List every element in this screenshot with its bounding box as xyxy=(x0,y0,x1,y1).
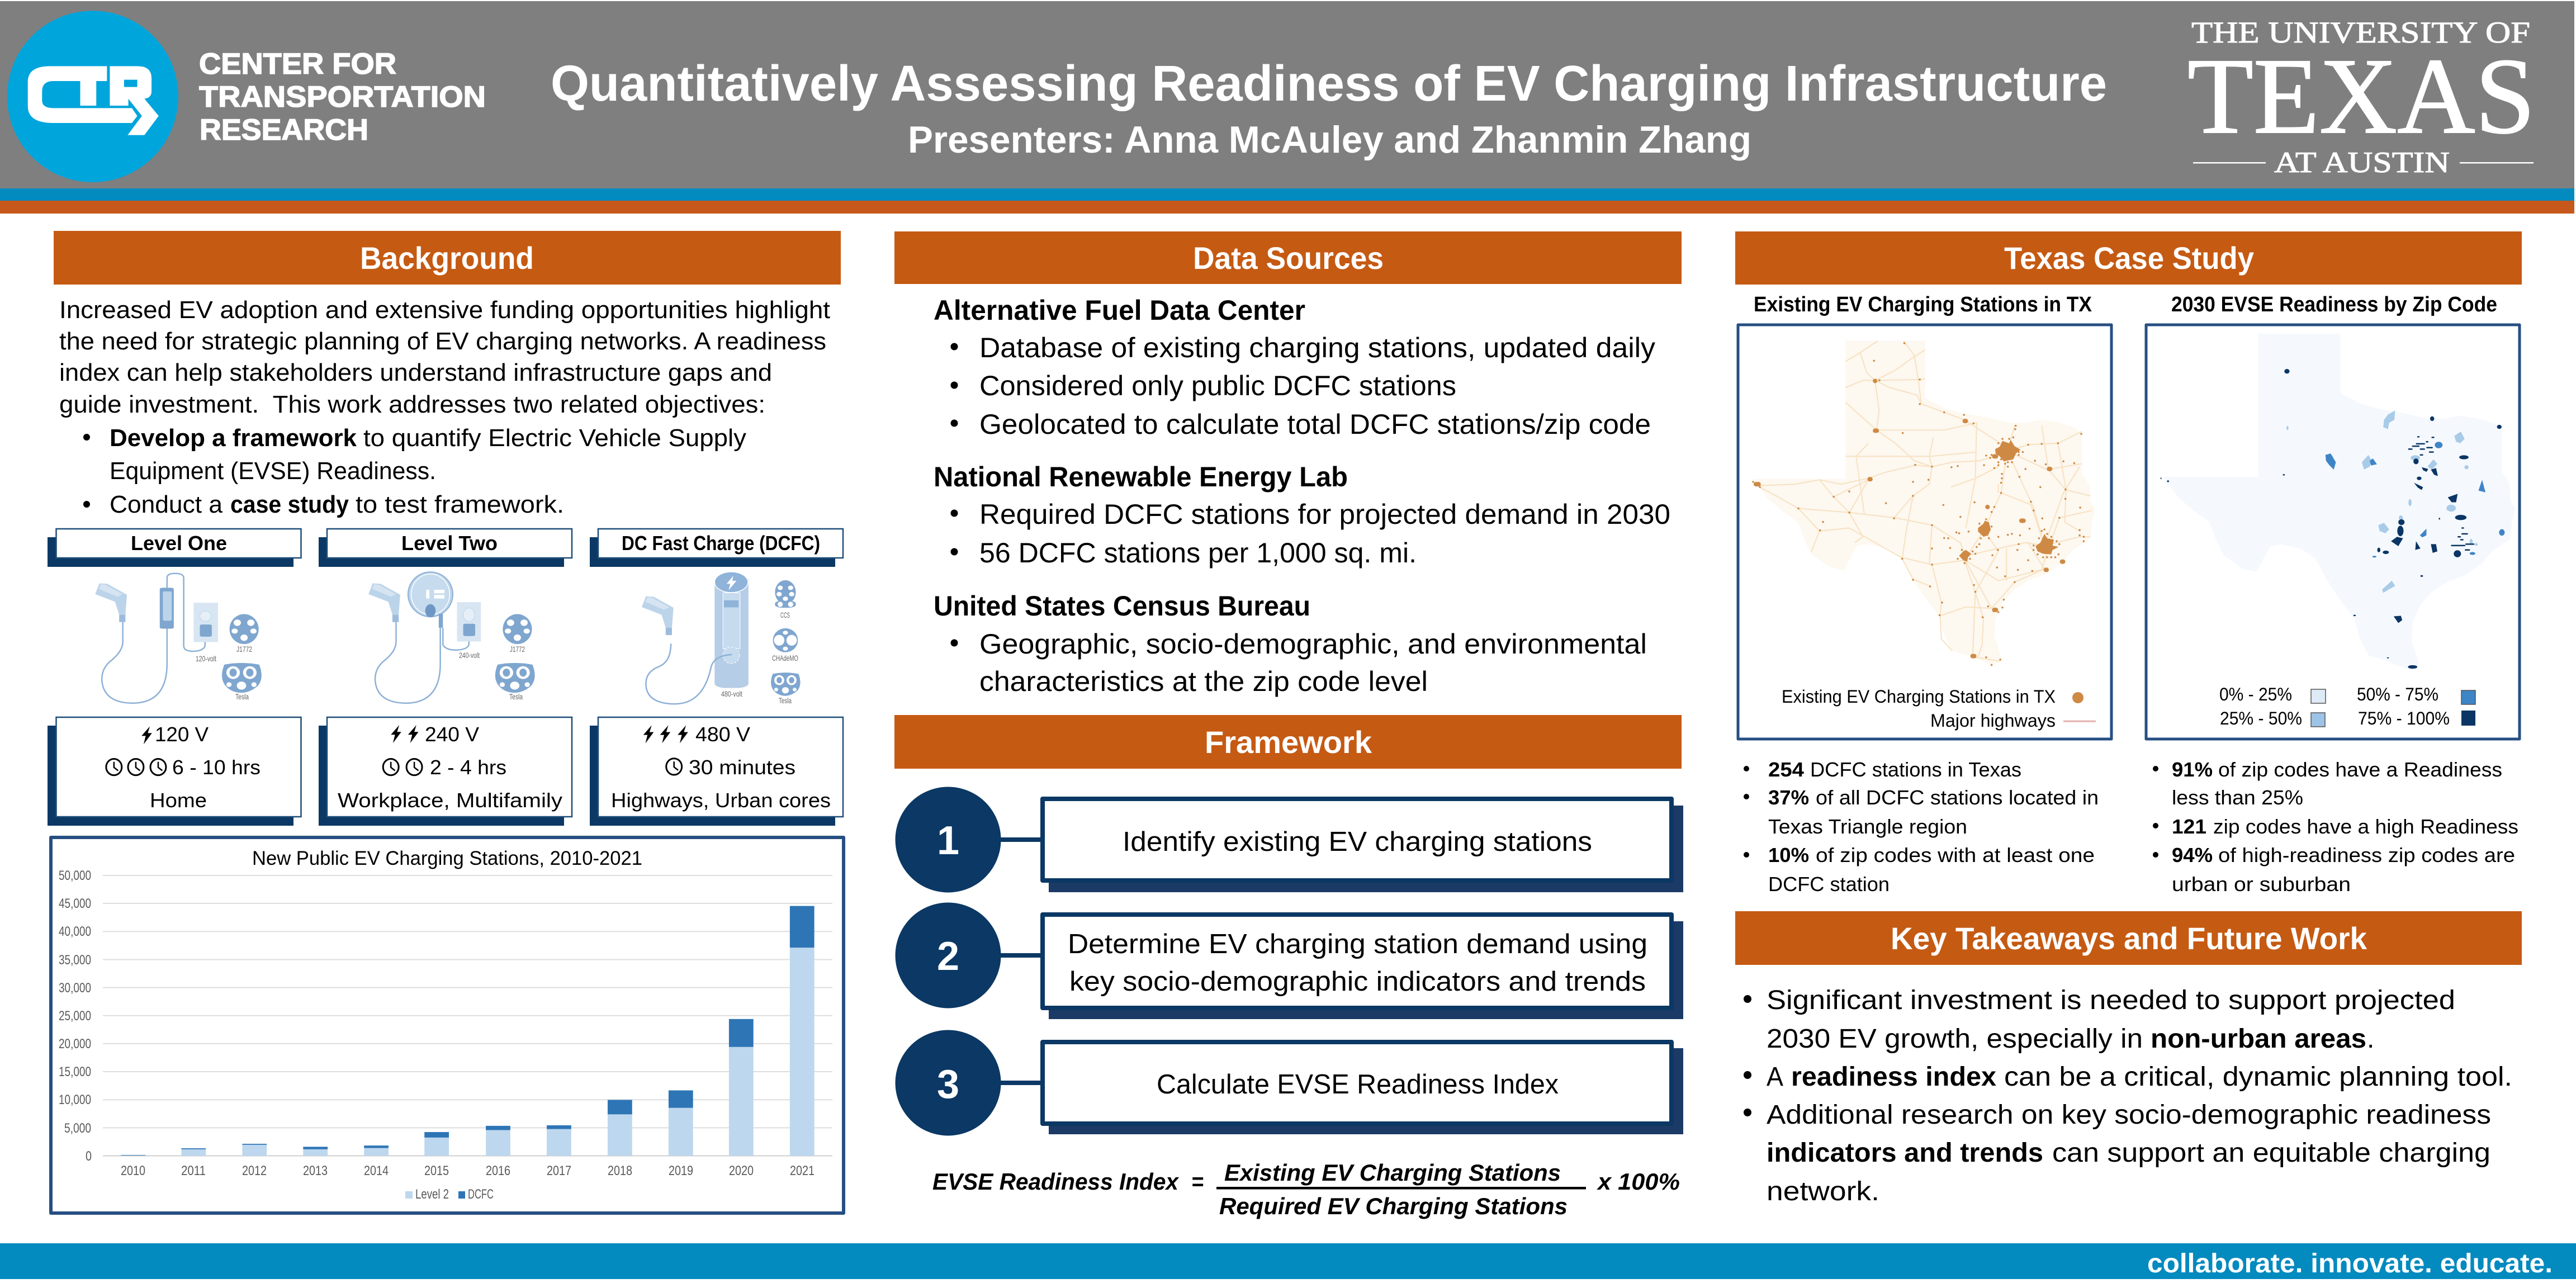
card: Level Two: 2 - 4 hrs xyxy=(430,756,506,779)
text block: National Renewable Energy Lab xyxy=(934,461,1670,569)
map legend: readiness xyxy=(2219,684,2475,728)
equipment labels: Tesla xyxy=(235,692,249,701)
map legend: stations: Major highways xyxy=(1930,711,2056,731)
heading: Background xyxy=(54,231,841,285)
card: DC Fast Charge: Highways, Urban cores xyxy=(611,789,831,812)
card: DC Fast Charge: 30 minutes xyxy=(689,756,795,779)
text block: takeaways: A xyxy=(1767,1062,1783,1092)
map: existing EV charging stations xyxy=(1738,325,2111,739)
text block: United States Census Bureau xyxy=(934,590,1647,697)
text block: takeaways: . xyxy=(2367,1024,2374,1054)
logo: University of Texas at Austin: TEXAS xyxy=(2187,36,2535,156)
text block: National Renewable Energy Lab: Required DCFC stations for projected demand in 2030 xyxy=(979,499,1670,530)
heading: Framework xyxy=(894,715,1682,769)
panel: Texas case study xyxy=(1735,231,2522,896)
text block: station statistics: of all DCFC stations located in xyxy=(1816,786,2099,809)
bar chart: new public EV charging stations: 20,000 xyxy=(59,1036,91,1052)
card: DC Fast Charge xyxy=(590,529,843,826)
equipment labels: J1772 xyxy=(236,645,252,654)
text block: Alternative Fuel Data Center: Considered only public DCFC stations xyxy=(979,370,1456,401)
logo: Center for Transportation Research wordmark: TRANSPORTATION xyxy=(199,80,486,113)
heading: Background: Background xyxy=(360,240,534,276)
icons: bolts and clocks xyxy=(106,725,688,775)
bar chart: new public EV charging stations: 0 xyxy=(86,1149,92,1164)
icon: level two charger xyxy=(368,572,535,703)
heading: Framework: Framework xyxy=(1205,724,1372,760)
heading: Data Sources xyxy=(894,231,1682,284)
chart legend: Level 2 xyxy=(415,1187,449,1202)
panel: framework xyxy=(894,715,1683,1219)
text block: readiness statistics: 121 xyxy=(2172,815,2206,838)
icon: charging equipment illustrations xyxy=(95,572,801,704)
text block: readiness statistics: urban or suburban xyxy=(2172,873,2351,896)
text block: background intro: guide investment. This work addresses two related objectives: xyxy=(59,391,765,418)
formula: EVSE readiness index: Required EV Charging Stations xyxy=(1219,1193,1568,1219)
map: 2030 EVSE readiness xyxy=(2146,325,2520,739)
formula: EVSE readiness index: = xyxy=(1191,1168,1204,1195)
heading: Data Sources: Data Sources xyxy=(1193,240,1384,276)
equipment labels: Tesla xyxy=(509,692,523,701)
text block: station statistics: 254 xyxy=(1768,758,1804,781)
presenters: Presenters: Anna McAuley and Zhanmin Zhang xyxy=(908,119,1751,161)
bar chart: new public EV charging stations: 5,000 xyxy=(64,1121,91,1136)
text block: objectives: to test framework. xyxy=(356,491,564,518)
logo: Center for Transportation Research wordmark xyxy=(199,48,486,146)
bar chart: new public EV charging stations: 2018 xyxy=(608,1163,632,1178)
bar chart: new public EV charging stations: 2020 xyxy=(729,1163,754,1178)
text block: Alternative Fuel Data Center: Geolocated to calculate total DCFC stations/zip code xyxy=(979,409,1651,440)
card: Level One: 120 V xyxy=(155,723,209,746)
logo: University of Texas at Austin: AT AUSTIN xyxy=(2274,146,2450,179)
bar chart: new public EV charging stations: 40,000 xyxy=(59,924,91,939)
text block: takeaways: indicators and trends xyxy=(1767,1138,2043,1168)
logo: Center for Transportation Research wordmark: CENTER FOR xyxy=(199,48,396,80)
text block: readiness statistics xyxy=(2153,758,2518,896)
map legend: readiness: 25% - 50% xyxy=(2220,708,2302,728)
text block: readiness statistics: 94% xyxy=(2172,844,2213,866)
text block: Alternative Fuel Data Center: Alternative Fuel Data Center xyxy=(934,295,1305,326)
equipment labels: CHAdeMO xyxy=(772,654,798,662)
icon: DC fast charger xyxy=(642,572,801,704)
step 2: 2 xyxy=(937,934,959,979)
text block: background intro: the need for strategic planning of EV charging networks. A readiness xyxy=(59,328,826,355)
step 2: key socio-demographic indicators and trends xyxy=(1069,967,1646,997)
text block: Alternative Fuel Data Center: Database of existing charging stations, updated daily xyxy=(979,332,1655,363)
text block: station statistics: DCFC stations in Texas xyxy=(1810,758,2021,781)
bar chart: new public EV charging stations: 45,000 xyxy=(59,896,91,911)
text block: objectives: Conduct a xyxy=(110,491,223,518)
equipment labels: 240-volt xyxy=(459,651,480,660)
heading: Key Takeaways and Future Work xyxy=(1735,911,2522,965)
formula: EVSE readiness index xyxy=(932,1159,1680,1219)
text block: station statistics: DCFC station xyxy=(1768,873,1890,896)
text block: objectives: Equipment (EVSE) Readiness. xyxy=(110,457,436,485)
map legend: readiness: 75% - 100% xyxy=(2358,708,2450,728)
bar chart: new public EV charging stations xyxy=(51,837,844,1213)
logo: University of Texas at Austin: THE UNIVERSITY OF xyxy=(2191,16,2530,49)
equipment labels: J1772 xyxy=(510,645,525,654)
bar chart: new public EV charging stations: 2014 xyxy=(364,1163,389,1178)
title: Quantitatively Assessing Readiness of EV Charging Infrastructure xyxy=(551,56,2107,112)
step 3: 3 xyxy=(937,1062,959,1107)
equipment labels: CCS xyxy=(780,610,790,619)
equipment labels xyxy=(196,610,798,705)
equipment labels: 120-volt xyxy=(196,654,216,663)
text block: station statistics: 10% xyxy=(1768,844,1809,866)
step 1: 1 xyxy=(937,818,959,863)
text block: background intro: index can help stakeholders understand infrastructure gaps and xyxy=(59,359,772,386)
chart legend xyxy=(405,1187,494,1202)
card: Level One: Home xyxy=(150,789,207,812)
chart legend: DCFC xyxy=(468,1187,494,1202)
card: Level Two: Workplace, Multifamily xyxy=(338,789,562,812)
text block: takeaways xyxy=(1744,986,2512,1206)
step 2 xyxy=(896,902,1683,1019)
step 3 xyxy=(896,1030,1683,1136)
step 1 xyxy=(896,787,1683,892)
card: Level Two: 240 V xyxy=(425,723,479,746)
panel: background xyxy=(48,231,844,1213)
equipment labels: Tesla xyxy=(779,696,792,705)
bar chart: new public EV charging stations: New Public EV Charging Stations, 2010-2021 xyxy=(252,847,642,869)
text block: readiness statistics: 91% xyxy=(2172,758,2213,781)
text block: objectives: Develop a framework xyxy=(110,424,357,452)
footer banner: collaborate. innovate. educate. xyxy=(2147,1249,2553,1278)
bar chart: new public EV charging stations: 2012 xyxy=(242,1163,267,1178)
text block: readiness statistics: zip codes have a high Readiness xyxy=(2213,815,2518,838)
text block: takeaways: readiness index xyxy=(1791,1062,1996,1092)
card: Level One: 6 - 10 hrs xyxy=(172,756,261,779)
map title: existing stations: Existing EV Charging Stations in TX xyxy=(1754,293,2092,316)
card: Level One: Level One xyxy=(131,532,227,555)
heading: Texas Case Study xyxy=(1735,231,2522,285)
text block: background intro: Increased EV adoption and extensive funding opportunities highlight xyxy=(59,296,830,324)
map legend: stations xyxy=(1782,686,2096,731)
text block: objectives: to quantify Electric Vehicle Supply xyxy=(363,424,746,452)
bar chart: new public EV charging stations: 2017 xyxy=(547,1163,571,1178)
map legend: readiness: 0% - 25% xyxy=(2219,684,2292,704)
map legend: readiness: 50% - 75% xyxy=(2357,684,2438,704)
panel: data sources xyxy=(894,231,1682,697)
card: Level One xyxy=(48,529,301,826)
bar chart: new public EV charging stations: 2016 xyxy=(486,1163,510,1178)
text block: takeaways: Additional research on key socio-demographic readiness xyxy=(1767,1100,2491,1130)
text block: station statistics: Texas Triangle region xyxy=(1768,815,1967,838)
text block: readiness statistics: of zip codes have a Readiness xyxy=(2218,758,2502,781)
text block: station statistics: of zip codes with at least one xyxy=(1816,844,2095,866)
formula: EVSE readiness index: Existing EV Charging Stations xyxy=(1224,1159,1561,1186)
bar chart: new public EV charging stations: 2021 xyxy=(790,1163,815,1178)
text block: takeaways: network. xyxy=(1767,1177,1879,1206)
bar chart: new public EV charging stations: 2010 xyxy=(121,1163,145,1178)
bar chart: new public EV charging stations: 2015 xyxy=(424,1163,449,1178)
bar chart: new public EV charging stations: 30,000 xyxy=(59,981,91,996)
text block: takeaways: can support an equitable charging xyxy=(2052,1138,2490,1168)
icon: level one charger xyxy=(95,574,262,703)
text block: background intro xyxy=(59,296,830,418)
bar chart: new public EV charging stations: 35,000 xyxy=(59,953,91,968)
text block: United States Census Bureau: characteristics at the zip code level xyxy=(979,666,1428,697)
text block: takeaways: 2030 EV growth, especially in xyxy=(1767,1024,2143,1054)
text block: objectives: case study xyxy=(230,491,349,518)
card: Level Two: Level Two xyxy=(401,532,498,555)
logo: CTR circle xyxy=(7,11,178,182)
heading: Texas Case Study: Texas Case Study xyxy=(2004,240,2254,276)
formula: EVSE readiness index: EVSE Readiness Index xyxy=(932,1168,1180,1195)
text block: takeaways: Significant investment is needed to support projected xyxy=(1767,986,2455,1015)
card: Level Two xyxy=(319,529,572,826)
text block: readiness statistics: less than 25% xyxy=(2172,786,2303,809)
text block: National Renewable Energy Lab: 56 DCFC stations per 1,000 sq. mi. xyxy=(979,537,1417,569)
logo: Center for Transportation Research wordmark: RESEARCH xyxy=(200,113,368,146)
text block: station statistics xyxy=(1744,758,2099,896)
bar chart: new public EV charging stations: 10,000 xyxy=(59,1092,91,1107)
step 2: Determine EV charging station demand using xyxy=(1068,929,1647,959)
text block: takeaways: non-urban areas xyxy=(2151,1024,2366,1054)
text block: Alternative Fuel Data Center xyxy=(934,295,1655,440)
text block: United States Census Bureau: Geographic, socio-demographic, and environmental xyxy=(979,628,1647,660)
formula: EVSE readiness index: x 100% xyxy=(1597,1168,1680,1195)
text block: station statistics: 37% xyxy=(1768,786,1809,809)
footer banner xyxy=(0,1243,2576,1279)
heading: Key Takeaways and Future Work: Key Takeaways and Future Work xyxy=(1891,921,2367,956)
map title: readiness: 2030 EVSE Readiness by Zip Code xyxy=(2171,293,2497,316)
panel: key takeaways xyxy=(1735,911,2522,1206)
step 1: Identify existing EV charging stations xyxy=(1123,827,1592,857)
bar chart: new public EV charging stations: 25,000 xyxy=(59,1008,91,1024)
step 3: Calculate EVSE Readiness Index xyxy=(1157,1069,1559,1100)
text block: United States Census Bureau: United States Census Bureau xyxy=(934,590,1310,622)
bar chart: new public EV charging stations: 2011 xyxy=(181,1163,206,1178)
bar chart: new public EV charging stations: 50,000 xyxy=(59,868,91,883)
text block: takeaways: can be a critical, dynamic planning tool. xyxy=(2004,1062,2512,1092)
map legend: stations: Existing EV Charging Stations in TX xyxy=(1782,686,2056,707)
bar chart: new public EV charging stations: 2013 xyxy=(303,1163,328,1178)
equipment labels: 480-volt xyxy=(721,689,742,698)
card: DC Fast Charge: 480 V xyxy=(695,723,750,746)
bar chart: new public EV charging stations: 2019 xyxy=(669,1163,693,1178)
text block: objectives xyxy=(83,424,746,518)
text block: readiness statistics: of high-readiness zip codes are xyxy=(2218,844,2515,866)
text block: National Renewable Energy Lab: National Renewable Energy Lab xyxy=(934,461,1348,493)
card: DC Fast Charge: DC Fast Charge (DCFC) xyxy=(622,532,820,555)
header banner xyxy=(0,1,2574,214)
bar chart: new public EV charging stations: 15,000 xyxy=(59,1064,91,1079)
